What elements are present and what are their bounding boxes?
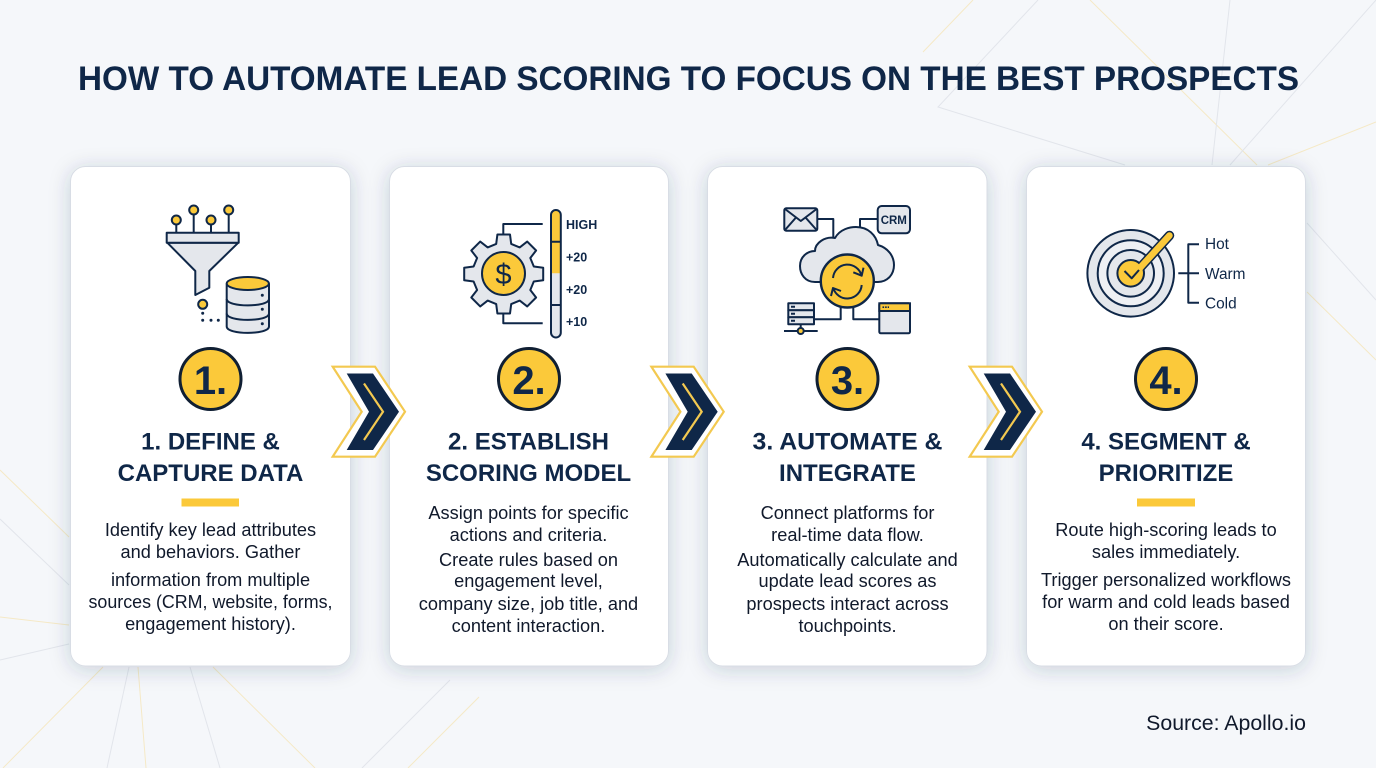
heading: step 3: INTEGRATE [779, 460, 916, 487]
text block: step 1 body: information from multiple [111, 570, 310, 590]
text block: step 1 body [88, 520, 332, 634]
text block: step 3 body: Connect platforms for [761, 503, 934, 523]
number badge 2: 2. [512, 359, 546, 403]
heading: step 4 [1081, 428, 1251, 487]
divider accent [1137, 498, 1195, 506]
arrow: step 1 to 2 [333, 367, 405, 457]
text block: step 3 body: touchpoints. [798, 616, 897, 636]
panel: step 4 segment and prioritize [1026, 166, 1306, 666]
heading: step 2: 2. ESTABLISH [448, 428, 609, 456]
icon: target with check: Cold [1205, 296, 1237, 313]
text block: step 2 body [419, 503, 638, 636]
heading: step 3: 3. AUTOMATE & [752, 428, 942, 456]
divider accent [182, 498, 239, 506]
text block: step 4 body: on their score. [1108, 614, 1224, 634]
number badge 4 [1136, 348, 1196, 410]
icon: gear with score bar: +10 [566, 315, 587, 329]
heading: step 1 [118, 428, 303, 487]
icon: gear with score bar: +20 [566, 283, 587, 297]
heading: step 3 [752, 428, 942, 487]
number badge 2 [498, 348, 560, 410]
arrow: step 2 to 3 [651, 367, 724, 457]
icon: gear with score bar: HIGH [566, 218, 597, 232]
heading: step 2 [426, 428, 631, 487]
text block: step 1 body: sources (CRM, website, forms, [88, 592, 332, 612]
icon: funnel and database [167, 206, 269, 333]
heading: step 4: PRIORITIZE [1099, 460, 1233, 487]
text block: step 3 body: prospects interact across [746, 594, 949, 614]
text block: step 1 body: Identify key lead attributes [105, 520, 316, 540]
text block: step 2 body: content interaction. [452, 616, 605, 636]
number badge 1: 1. [194, 359, 227, 403]
icon: cloud integration [784, 206, 910, 334]
text block: step 3 body: update lead scores as [759, 571, 936, 591]
heading: step 4: 4. SEGMENT & [1081, 428, 1251, 456]
icon: target with check [1087, 230, 1245, 317]
number badge 4: 4. [1149, 359, 1183, 403]
title: HOW TO AUTOMATE LEAD SCORING TO FOCUS ON THE BEST PROSPECTS [78, 60, 1299, 98]
number badge 1 [180, 348, 241, 410]
text block: step 1 body: engagement history). [125, 614, 296, 634]
text block: step 4 body: for warm and cold leads based [1042, 592, 1290, 612]
text block: step 4 body: Trigger personalized workflows [1041, 570, 1291, 590]
text block: step 1 body: and behaviors. Gather [121, 542, 300, 562]
text block: step 3 body: real-time data flow. [771, 525, 924, 545]
panel: step 2 establish scoring model [390, 166, 668, 666]
text block: step 2 body: actions and criteria. [450, 525, 607, 545]
text block: step 2 body: engagement level, [454, 571, 603, 591]
icon: gear with score bar: $ [495, 259, 512, 291]
panel: step 3 automate and integrate [708, 166, 987, 666]
heading: step 2: SCORING MODEL [426, 460, 631, 487]
icon: gear with score bar: +20 [566, 251, 587, 265]
heading: step 1: 1. DEFINE & [141, 428, 280, 456]
text block: step 4 body [1041, 520, 1291, 634]
arrow: step 3 to 4 [970, 367, 1042, 457]
text block: step 4 body: Route high-scoring leads to [1055, 520, 1277, 540]
icon: gear with score bar [464, 210, 597, 338]
heading: step 1: CAPTURE DATA [118, 460, 303, 487]
number badge 3 [817, 348, 878, 410]
text block: step 4 body: sales immediately. [1092, 542, 1240, 562]
text block: step 2 body: Create rules based on [439, 550, 618, 570]
source note: Source: Apollo.io [1146, 711, 1306, 735]
panel: step 1 define and capture data [70, 166, 350, 666]
text block: step 2 body: company size, job title, and [419, 594, 638, 614]
number badge 3: 3. [831, 359, 864, 403]
text block: step 3 body [737, 503, 958, 636]
text block: step 2 body: Assign points for specific [428, 503, 629, 523]
icon: target with check: Hot [1205, 236, 1230, 253]
text block: step 3 body: Automatically calculate and [737, 550, 958, 570]
icon: cloud integration: CRM [881, 215, 907, 227]
icon: target with check: Warm [1205, 266, 1245, 283]
